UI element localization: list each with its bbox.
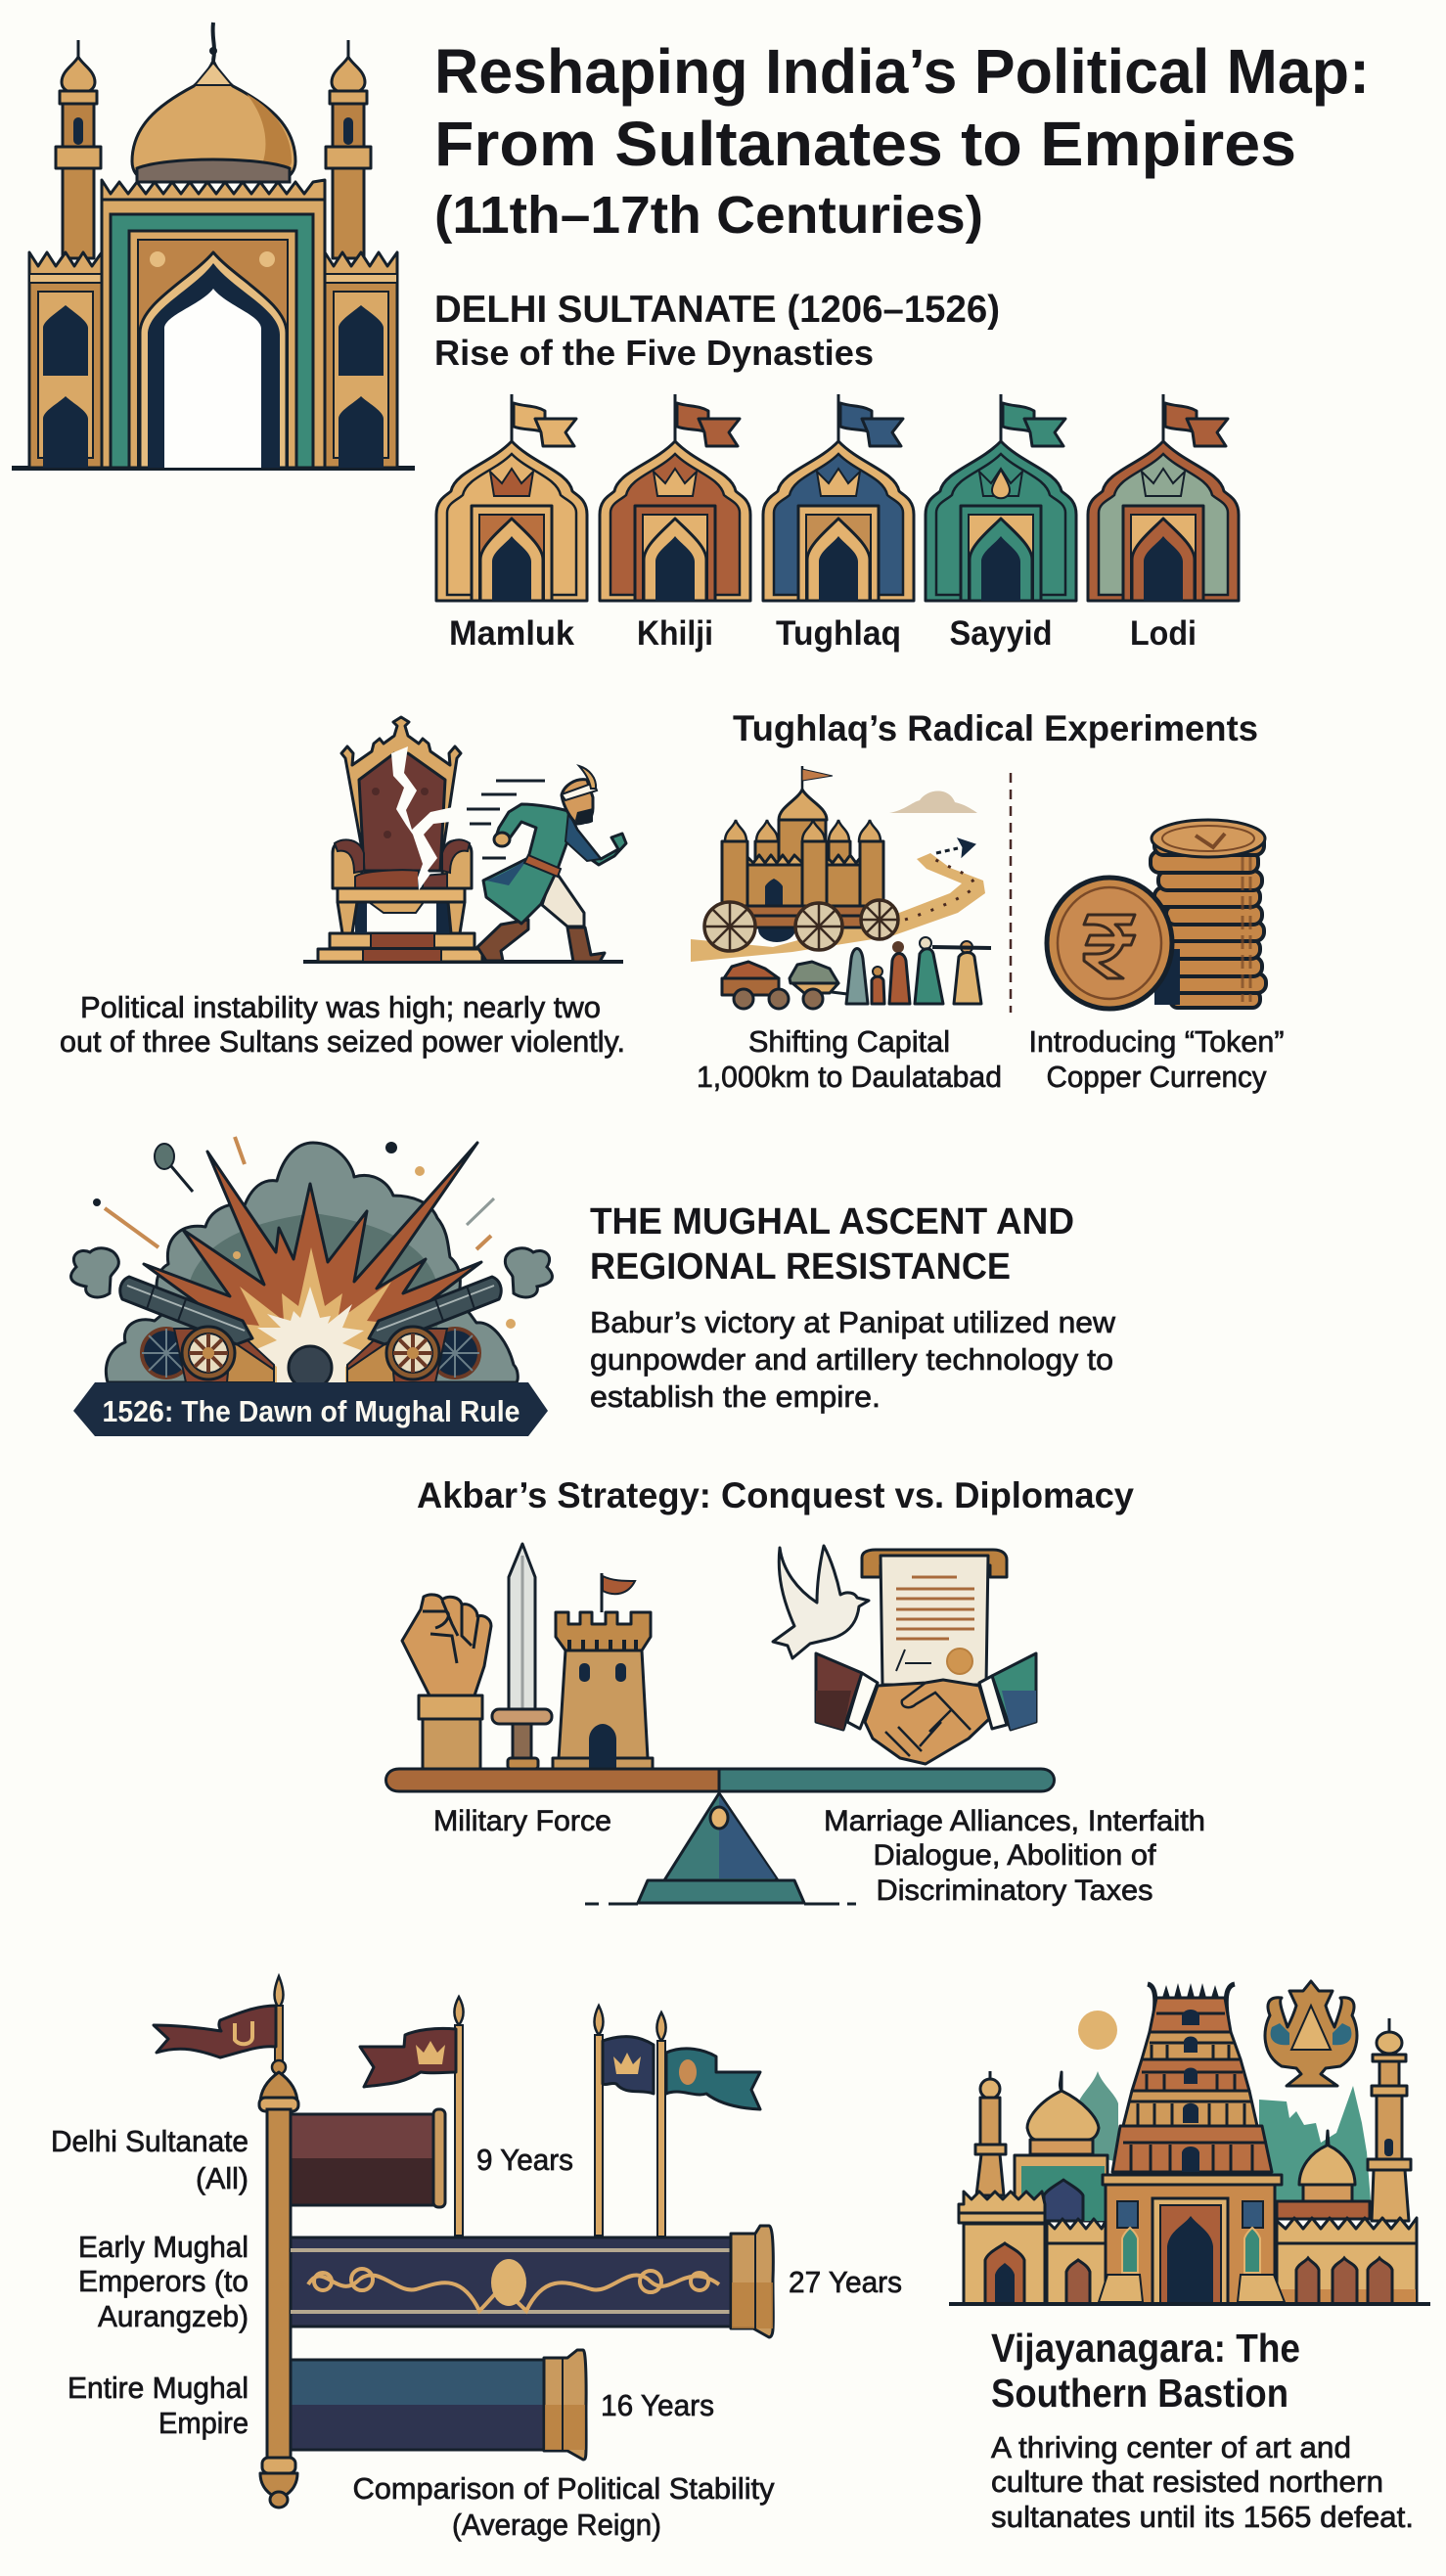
icon: tower	[553, 1573, 653, 1769]
title: Reshaping India’s Political Map:	[434, 36, 1370, 107]
label: diplomacy measures: Discriminatory Taxes	[877, 1875, 1152, 1907]
banner flags	[154, 1997, 760, 2237]
label: diplomacy measures	[824, 1805, 1205, 1907]
heading: Vijayanagara: Vijayanagara: The	[991, 2326, 1300, 2371]
text: political instability: Political instability was high; nearly two	[80, 990, 601, 1024]
text: Vijayanagara description	[991, 2430, 1414, 2534]
icon: handshake	[816, 1653, 1036, 1764]
label: diplomacy measures: Dialogue, Abolition of	[873, 1839, 1156, 1872]
text: political instability	[60, 990, 625, 1059]
chart pole	[259, 1976, 298, 2508]
caption: political stability comparison: (Average Reign)	[452, 2508, 661, 2542]
balance beam	[385, 1769, 1055, 1791]
dynasty: Lodi	[1088, 394, 1239, 653]
icon: sword	[492, 1544, 552, 1769]
text: Vijayanagara description: sultanates until its 1565 defeat.	[991, 2500, 1414, 2534]
section heading: Delhi Sultanate: Rise of the Five Dynasties	[434, 333, 874, 373]
labels: chart categories: Empire	[158, 2406, 249, 2440]
labels: chart categories: Entire Mughal	[68, 2371, 249, 2405]
dynasty: Tughlaq: Tughlaq	[776, 614, 901, 653]
banner: 1526 dawn of Mughal rule	[73, 1382, 548, 1436]
heading: Vijayanagara: Southern Bastion	[991, 2371, 1288, 2416]
heading: Mughal ascent: REGIONAL RESISTANCE	[590, 1246, 1011, 1288]
icon: cracked throne	[303, 717, 623, 964]
heading: Mughal ascent: THE MUGHAL ASCENT AND	[590, 1201, 1074, 1243]
text: Vijayanagara description: A thriving center of art and	[991, 2430, 1351, 2464]
text: Babur's victory: establish the empire.	[590, 1379, 881, 1414]
dynasty: Tughlaq	[763, 394, 914, 653]
text: Babur's victory: Babur’s victory at Panipat utilized new	[590, 1305, 1116, 1339]
label: military force: Military Force	[433, 1805, 611, 1837]
heading: Akbar's strategy: Akbar’s Strategy: Conquest vs. Diplomacy	[417, 1475, 1134, 1515]
icon: main sultanate gateway	[12, 23, 415, 471]
heading: Tughlaq's experiments: Tughlaq’s Radical Experiments	[733, 708, 1258, 748]
dynasty: Khilji	[600, 394, 750, 653]
bar: Entire Mughal 16 years	[291, 2350, 586, 2460]
icon: fist	[402, 1595, 491, 1769]
caption: token currency: Introducing “Token”	[1029, 1024, 1284, 1059]
gopuram tower	[1112, 1983, 1272, 2172]
labels: chart values	[476, 2143, 902, 2422]
banner: 1526 dawn of Mughal rule: 1526: The Dawn of Mughal Rule	[102, 1394, 520, 1428]
caption: shifting capital: Shifting Capital	[748, 1024, 950, 1059]
icon: capital on wheels with road and migrants	[691, 766, 991, 1009]
icon: Panipat cannons and explosion	[71, 1137, 552, 1389]
labels: chart values: 27 Years	[789, 2265, 902, 2299]
labels: chart values: 9 Years	[476, 2143, 573, 2177]
labels: chart categories: Aurangzeb)	[98, 2299, 249, 2333]
dynasty: Mamluk: Mamluk	[449, 614, 575, 653]
label: diplomacy measures: Marriage Alliances, Interfaith	[824, 1805, 1205, 1837]
labels: chart categories	[51, 2124, 249, 2440]
title: From Sultanates to Empires	[434, 109, 1296, 179]
icon: Vijayanagara city and temple	[949, 1981, 1430, 2306]
caption: shifting capital	[697, 1024, 1002, 1094]
icon: lotus emblem	[1265, 1981, 1357, 2086]
text: Babur's victory	[590, 1305, 1116, 1414]
labels: chart categories: Delhi Sultanate	[51, 2124, 249, 2158]
title	[434, 36, 1370, 245]
dynasty: Sayyid: Sayyid	[949, 614, 1053, 653]
heading: Mughal ascent	[590, 1201, 1074, 1288]
bar: Delhi Sultanate 9 years	[291, 2109, 445, 2207]
caption: token currency	[1029, 1024, 1284, 1094]
caption: shifting capital: 1,000km to Daulatabad	[697, 1060, 1002, 1094]
dynasty: Lodi: Lodi	[1130, 614, 1197, 653]
divider: dashed line	[1010, 773, 1012, 1013]
dynasty: Khilji: Khilji	[637, 614, 713, 653]
text: Vijayanagara description: culture that resisted northern	[991, 2464, 1383, 2499]
fulcrum	[585, 1793, 856, 1904]
dynasty: Sayyid	[926, 394, 1076, 653]
bar: Early Mughal 27 years	[291, 2226, 773, 2337]
chart: average reign comparison	[154, 1976, 773, 2508]
caption: token currency: Copper Currency	[1047, 1060, 1267, 1094]
section heading: Delhi Sultanate: DELHI SULTANATE (1206–1526)	[434, 289, 1000, 331]
icon: token copper coins	[1047, 820, 1266, 1009]
labels: chart categories: Emperors (to	[78, 2264, 249, 2298]
chart: conquest vs diplomacy balance scale	[385, 1544, 1055, 1904]
dynasty: Mamluk	[436, 394, 587, 653]
title: (11th–17th Centuries)	[434, 186, 983, 245]
section heading: Delhi Sultanate	[434, 289, 1000, 373]
labels: chart categories: (All)	[196, 2161, 249, 2195]
labels: chart categories: Early Mughal	[78, 2230, 249, 2264]
text: Babur's victory: gunpowder and artillery technology to	[590, 1342, 1113, 1377]
icon: fleeing sultan	[467, 766, 626, 962]
heading: Vijayanagara	[991, 2326, 1300, 2416]
icon: dove	[773, 1546, 869, 1658]
labels: chart values: 16 Years	[601, 2388, 714, 2422]
text: political instability: out of three Sultans seized power violently.	[60, 1024, 625, 1059]
caption: political stability comparison: Comparison of Political Stability	[352, 2471, 775, 2506]
icon: treaty scroll	[862, 1550, 1007, 1685]
caption: political stability comparison	[352, 2471, 775, 2542]
panel: five dynasties	[436, 394, 1239, 653]
